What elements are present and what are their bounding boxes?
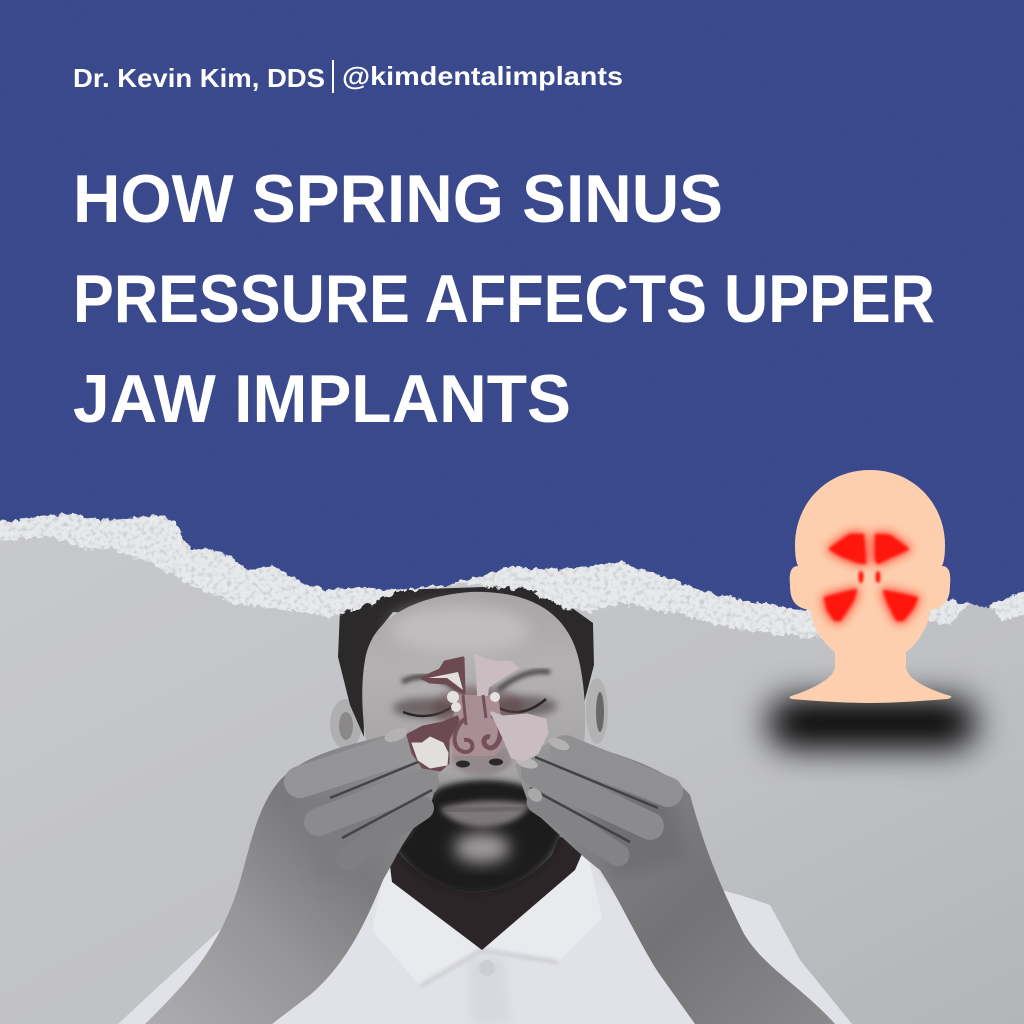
ears — [330, 678, 608, 749]
right maxillary sinus — [492, 713, 547, 760]
inflamed sinus cores — [825, 535, 917, 620]
ethmoid sinuses — [447, 691, 500, 712]
moustache, mouth and beard — [392, 780, 562, 893]
neck — [388, 835, 590, 950]
shirt — [118, 855, 852, 1024]
torn white paper edge — [0, 505, 1024, 638]
nose — [452, 740, 512, 776]
byline: doctor name and handle: Dr. Kevin Kim, DDS — [73, 63, 325, 93]
hair — [338, 585, 594, 737]
title: HOW SPRING SINUS — [73, 161, 723, 237]
title — [73, 161, 935, 437]
sinus glow — [825, 535, 917, 620]
byline: doctor name and handle: @kimdentalimplants — [342, 61, 623, 91]
head silhouette — [790, 470, 951, 703]
right frontal sinus — [475, 655, 518, 695]
left hand and forearm — [145, 725, 440, 1024]
face — [362, 592, 585, 893]
shadow under head icon — [768, 698, 976, 748]
title: JAW IMPLANTS — [73, 361, 571, 437]
photo: man pressing on his sinuses — [118, 585, 852, 1024]
face shading — [390, 606, 557, 718]
icon: head with inflamed sinuses — [790, 470, 951, 703]
left maxillary sinus — [408, 717, 458, 770]
background: grey wall — [0, 500, 1024, 1024]
sinus anatomy overlay — [408, 655, 547, 770]
blue torn-paper header — [0, 0, 1024, 610]
nasal cavity — [448, 695, 505, 756]
left frontal sinus — [422, 658, 464, 693]
nasal septum and conchae — [455, 695, 500, 752]
title: PRESSURE AFFECTS UPPER — [73, 261, 935, 337]
right hand and forearm — [515, 735, 835, 1024]
byline: doctor name and handle — [73, 60, 623, 93]
